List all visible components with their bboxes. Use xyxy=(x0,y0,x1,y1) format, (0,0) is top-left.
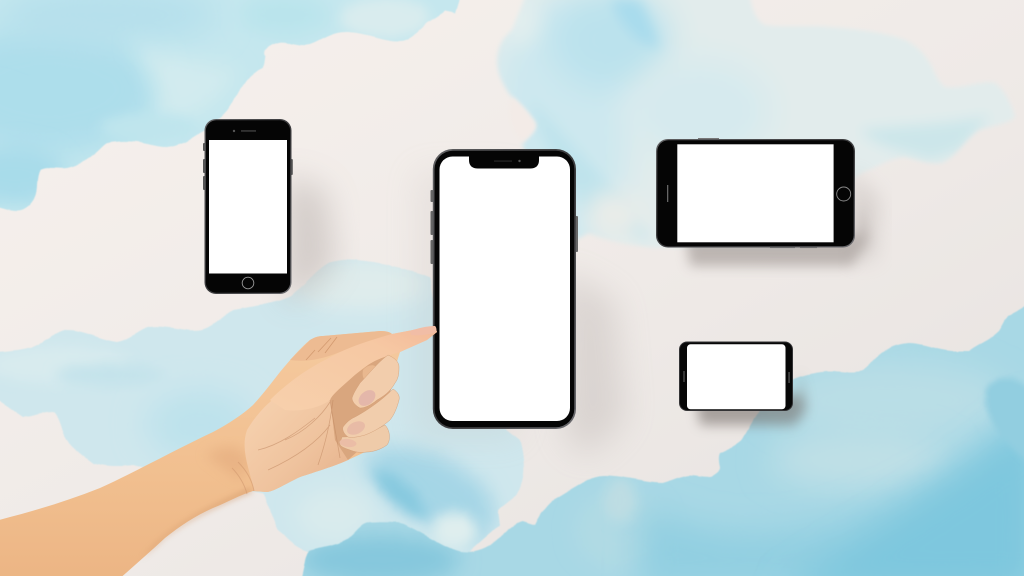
phone 1: small portrait with home button xyxy=(203,119,335,300)
fingernail: index xyxy=(410,326,436,335)
wash: middle and lower left xyxy=(0,255,530,565)
wrist fold xyxy=(232,462,254,494)
hand and arm pointing at the large phone xyxy=(0,326,437,576)
curled finger: middle xyxy=(352,355,399,408)
phone 4: small landscape xyxy=(679,342,806,425)
inside of hand behind fingers xyxy=(330,355,395,460)
palm xyxy=(245,385,348,492)
wash: top left xyxy=(0,0,480,220)
curled finger: ring xyxy=(343,389,399,437)
arm and back of hand xyxy=(0,326,437,576)
wash: top right (soft, pale) xyxy=(480,0,1024,260)
index finger xyxy=(270,326,437,411)
fingernail: ring xyxy=(345,419,367,437)
tucked thumb tip xyxy=(363,365,375,381)
curled finger: little xyxy=(340,425,389,452)
paper patch inside top-right wash xyxy=(509,97,535,143)
notch xyxy=(469,155,539,168)
fingernail: little xyxy=(339,438,357,448)
phone 2: large portrait with notch xyxy=(415,149,625,455)
palm creases xyxy=(258,400,340,470)
knuckle creases xyxy=(306,337,337,360)
wash: bottom right xyxy=(295,295,1024,576)
back of hand knuckle area xyxy=(290,331,392,361)
phone 3: landscape with home button xyxy=(656,138,880,266)
arm tendon shading xyxy=(140,488,253,560)
fingernail: middle xyxy=(356,387,378,409)
